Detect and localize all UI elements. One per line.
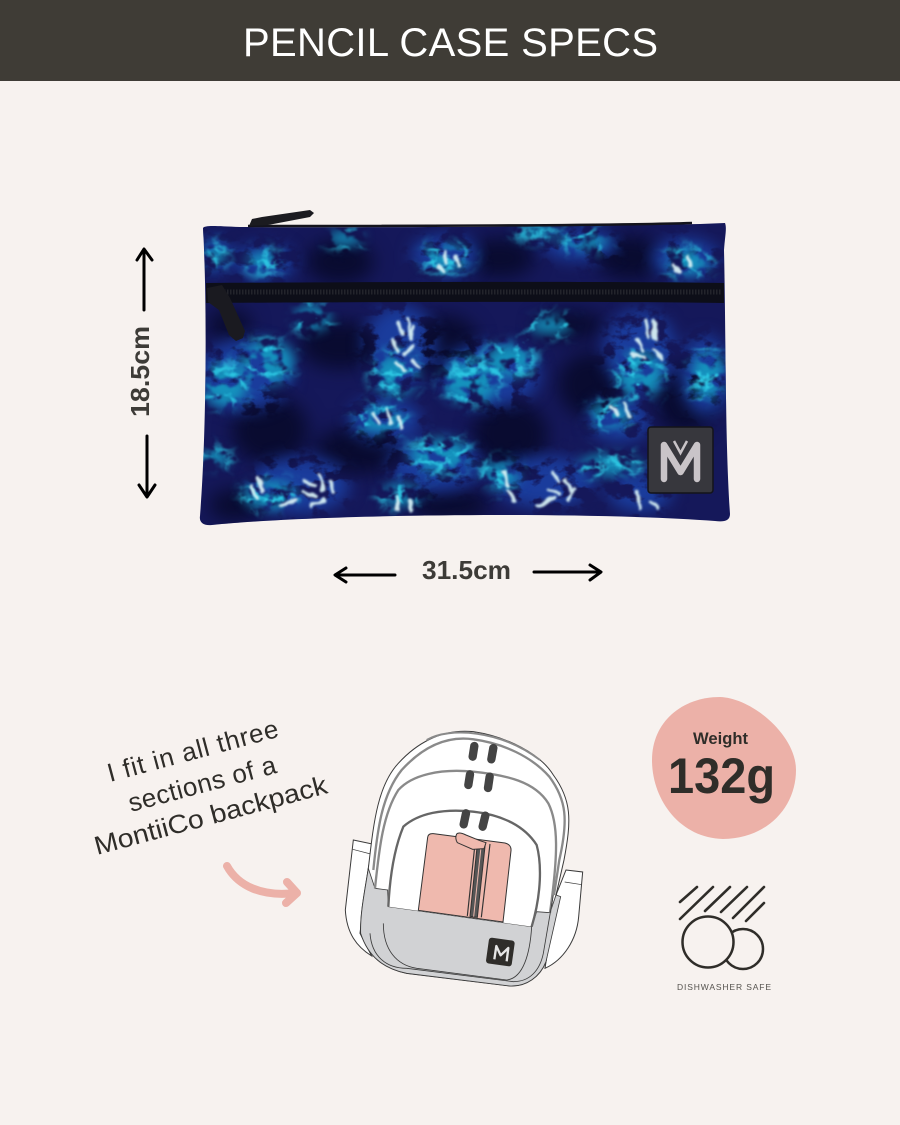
- callout text: sections of a: [125, 749, 280, 818]
- title banner: [0, 0, 900, 81]
- top zipper pull: [249, 210, 314, 226]
- zipper pulls: [464, 746, 493, 827]
- front zipper pull: [207, 285, 245, 341]
- icon: dishwasher safe: [677, 887, 771, 992]
- backpack logo: [486, 937, 515, 967]
- logo badge: [648, 427, 713, 493]
- zip seams: [373, 739, 565, 895]
- weight badge: 132g: [668, 748, 775, 804]
- backpack illustration: [345, 731, 583, 986]
- pencil case in pocket: [418, 833, 511, 922]
- main body: [361, 731, 569, 986]
- icon: dishwasher safe: DISHWASHER SAFE: [677, 982, 771, 992]
- height arrows and label: [125, 249, 155, 497]
- height arrows and label: 18.5cm: [125, 326, 155, 417]
- weight badge: [652, 697, 796, 839]
- top zipper: [248, 223, 692, 226]
- pencil case photo: [195, 210, 735, 530]
- grey base: [361, 868, 561, 986]
- side pockets: [345, 840, 372, 956]
- weight badge: Weight: [693, 729, 748, 748]
- callout text: I fit in all three: [104, 713, 282, 788]
- width arrows and label: 31.5cm: [422, 555, 511, 585]
- width arrows and label: [335, 555, 601, 585]
- curved pink arrow: [227, 866, 297, 903]
- callout text: MontiiCo backpack: [91, 769, 331, 861]
- title banner: PENCIL CASE SPECS: [243, 21, 658, 65]
- front zipper: [206, 282, 724, 303]
- callout text: [91, 713, 331, 861]
